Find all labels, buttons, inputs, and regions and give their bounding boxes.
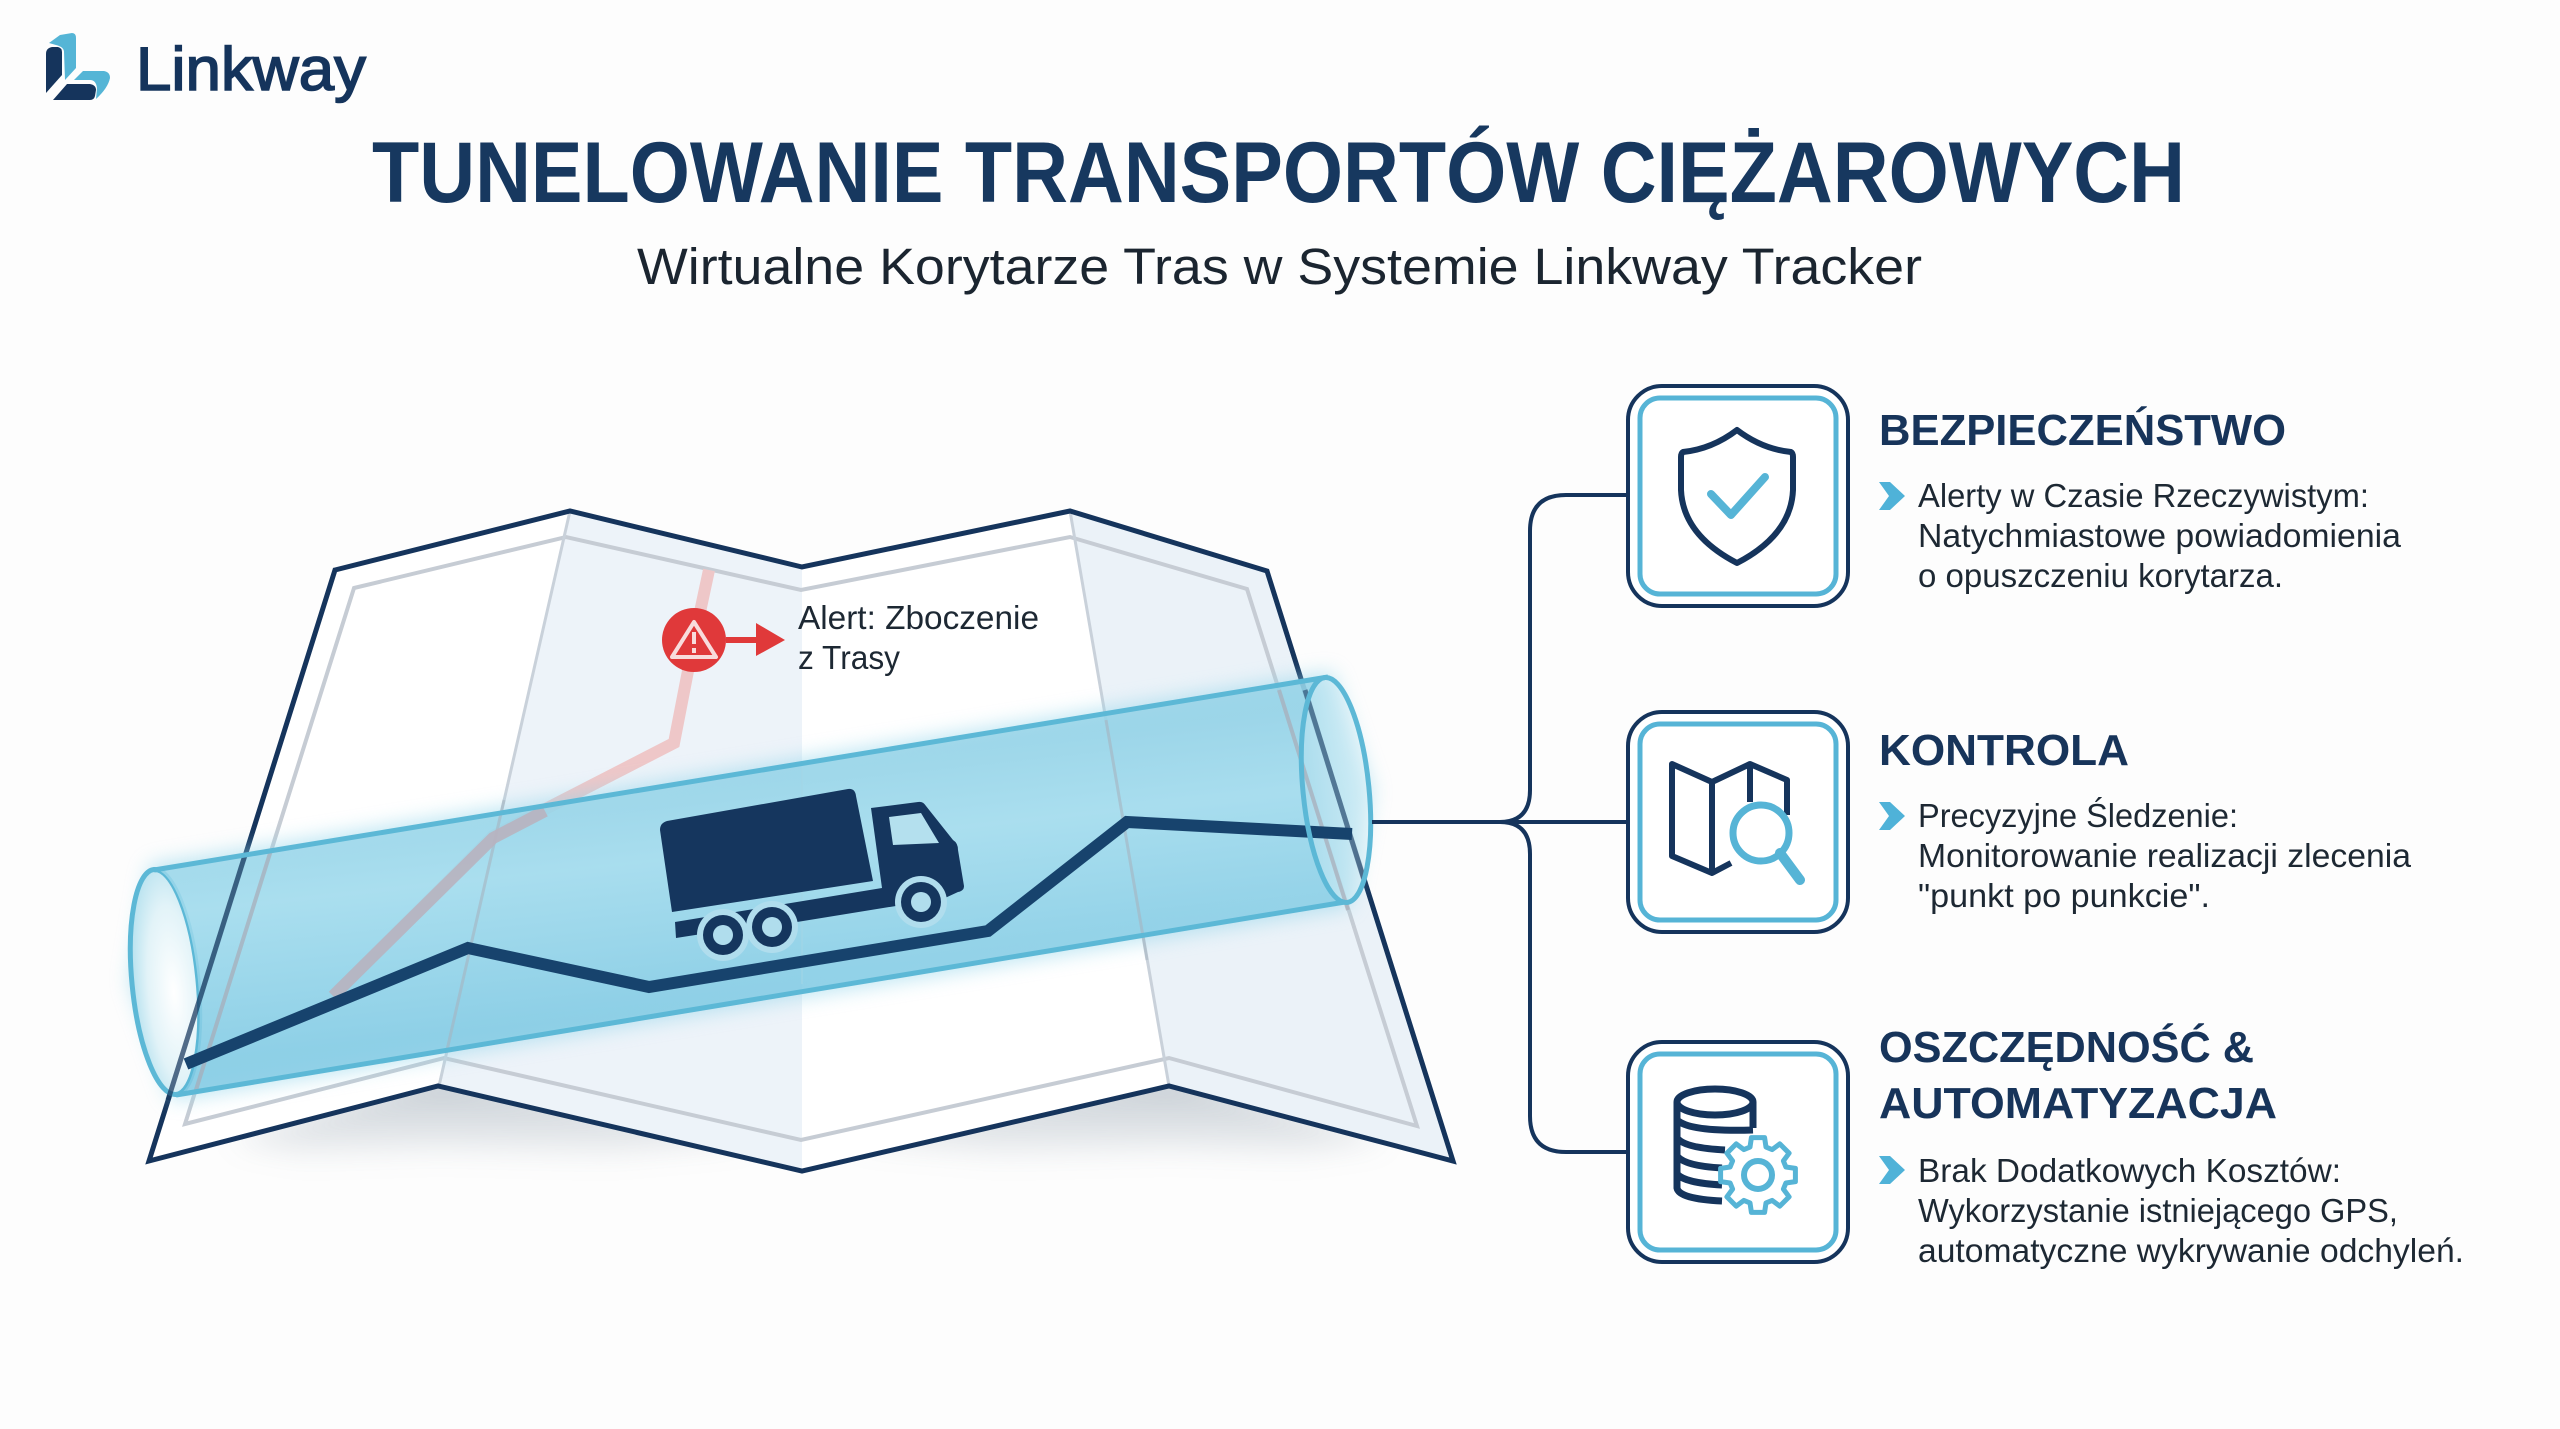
panel: oszczędność i automatyzacja: [1628, 1022, 2464, 1269]
bullet chevron: [1879, 482, 1905, 510]
description: Natychmiastowe powiadomienia: [1918, 517, 2402, 554]
illustration: folded map with tunnel: [121, 511, 1453, 1171]
deviation route seen through tunnel: [333, 811, 545, 996]
icon card: map with magnifier: [1628, 712, 1848, 932]
heading: AUTOMATYZACJA: [1879, 1079, 2277, 1128]
icon card: database with gear: [1628, 1042, 1848, 1262]
logo: Linkway: [46, 33, 367, 103]
left cap: [121, 866, 209, 1098]
tube body: [154, 677, 1345, 1095]
description: o opuszczeniu korytarza.: [1918, 557, 2283, 594]
connector bracket: [1372, 495, 1628, 1152]
bullet chevron: [1879, 1156, 1905, 1184]
heading: BEZPIECZEŃSTWO: [1879, 405, 2286, 455]
alert marker: [662, 599, 1039, 676]
title: TUNELOWANIE TRANSPORTÓW CIĘŻAROWYCH: [372, 125, 2185, 221]
map shadow: [230, 1068, 1390, 1155]
description: Alerty w Czasie Rzeczywistym:: [1918, 477, 2369, 514]
icon card: shield: [1628, 386, 1848, 606]
description: Wykorzystanie istniejącego GPS,: [1918, 1192, 2398, 1229]
bullet chevron: [1879, 802, 1905, 830]
map lines seen through tunnel: [168, 690, 1364, 1100]
heading: OSZCZĘDNOŚĆ &: [1879, 1022, 2254, 1072]
alert label: Alert: Zboczenie: [798, 599, 1039, 636]
icon: warning: [662, 608, 726, 672]
subtitle: Wirtualne Korytarze Tras w Systemie Linkway Tracker: [637, 238, 1922, 295]
icon: truck: [660, 789, 964, 961]
planned route: [186, 822, 1352, 1064]
description: "punkt po punkcie".: [1918, 877, 2210, 914]
right cap interior: [1292, 674, 1380, 906]
virtual corridor tunnel: [121, 674, 1380, 1098]
logo wordmark: Linkway: [136, 35, 367, 103]
description: Precyzyjne Śledzenie:: [1918, 796, 2238, 834]
icon: logo mark: [46, 33, 110, 100]
description: Brak Dodatkowych Kosztów:: [1918, 1152, 2341, 1189]
folded map: [149, 511, 1453, 1171]
arrow: deviation: [726, 623, 785, 656]
panel: bezpieczeństwo: [1628, 386, 2402, 606]
alert label: z Trasy: [798, 639, 900, 676]
description: Monitorowanie realizacji zlecenia: [1918, 837, 2412, 874]
red deviation route: [338, 570, 709, 991]
tube outlines: [154, 674, 1380, 1095]
heading: KONTROLA: [1879, 726, 2129, 775]
description: automatyczne wykrywanie odchyleń.: [1918, 1232, 2464, 1269]
panel: kontrola: [1628, 712, 2412, 932]
tunnel glow: [130, 672, 1372, 1100]
